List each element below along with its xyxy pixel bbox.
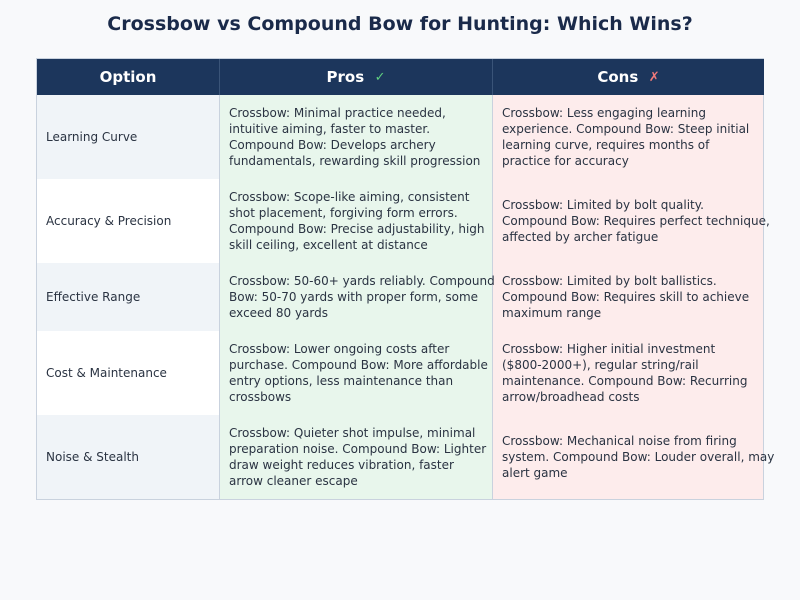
- title: Crossbow vs Compound Bow for Hunting: Which Wins?: [107, 13, 693, 35]
- table: Crossbow: Lower ongoing costs after: [229, 342, 449, 356]
- row: noise: Noise & Stealth: [46, 450, 139, 464]
- table: skill ceiling, excellent at distance: [229, 238, 428, 252]
- row: cost: Cost & Maintenance: [46, 366, 167, 380]
- table: Crossbow: Limited by bolt ballistics.: [502, 274, 717, 288]
- table: practice for accuracy: [502, 154, 629, 168]
- table: Compound Bow: Develops archery: [229, 138, 436, 152]
- table: fundamentals, rewarding skill progression: [229, 154, 480, 168]
- table: Crossbow: Mechanical noise from firing: [502, 434, 737, 448]
- table: [36, 58, 764, 500]
- header: option: Option: [100, 68, 156, 86]
- row: accuracy: Accuracy & Precision: [46, 214, 171, 228]
- row: cost: [37, 331, 219, 415]
- table: purchase. Compound Bow: More affordable: [229, 358, 488, 372]
- row: range: Effective Range: [46, 290, 140, 304]
- row: range: [37, 263, 219, 331]
- row: noise: [37, 415, 219, 499]
- table: alert game: [502, 466, 568, 480]
- table: learning curve, requires months of: [502, 138, 709, 152]
- row: accuracy: [37, 179, 219, 263]
- table: maximum range: [502, 306, 601, 320]
- header: cons: Cons: [597, 68, 638, 86]
- table: ($800-2000+), regular string/rail: [502, 358, 699, 372]
- row: learning curve: Learning Curve: [46, 130, 137, 144]
- table: arrow cleaner escape: [229, 474, 358, 488]
- table: Crossbow: Higher initial investment: [502, 342, 715, 356]
- header: pros: [219, 59, 492, 95]
- table: draw weight reduces vibration, faster: [229, 458, 454, 472]
- table: Crossbow: 50-60+ yards reliably. Compound: [229, 274, 495, 288]
- header: option: [37, 59, 219, 95]
- table: Crossbow: Less engaging learning: [502, 106, 706, 120]
- table: exceed 80 yards: [229, 306, 328, 320]
- table: preparation noise. Compound Bow: Lighter: [229, 442, 486, 456]
- header: cons: ✗: [649, 70, 660, 84]
- table: arrow/broadhead costs: [502, 390, 639, 404]
- table: shot placement, forgiving form errors.: [229, 206, 458, 220]
- table: Crossbow: Scope-like aiming, consistent: [229, 190, 470, 204]
- table: Compound Bow: Requires perfect technique,: [502, 214, 770, 228]
- table: affected by archer fatigue: [502, 230, 658, 244]
- row: learning curve: [37, 95, 219, 179]
- table: Crossbow: Quieter shot impulse, minimal: [229, 426, 475, 440]
- table: maintenance. Compound Bow: Recurring: [502, 374, 747, 388]
- table: Compound Bow: Precise adjustability, high: [229, 222, 484, 236]
- table: Bow: 50-70 yards with proper form, some: [229, 290, 478, 304]
- header: pros: ✓: [375, 70, 385, 84]
- table: Crossbow: Limited by bolt quality.: [502, 198, 704, 212]
- table: crossbows: [229, 390, 291, 404]
- table: Crossbow: Minimal practice needed,: [229, 106, 446, 120]
- header: cons: [492, 59, 764, 95]
- table: entry options, less maintenance than: [229, 374, 453, 388]
- table: experience. Compound Bow: Steep initial: [502, 122, 749, 136]
- table: intuitive aiming, faster to master.: [229, 122, 430, 136]
- header: pros: Pros: [326, 68, 364, 86]
- table: Compound Bow: Requires skill to achieve: [502, 290, 749, 304]
- table: system. Compound Bow: Louder overall, may: [502, 450, 774, 464]
